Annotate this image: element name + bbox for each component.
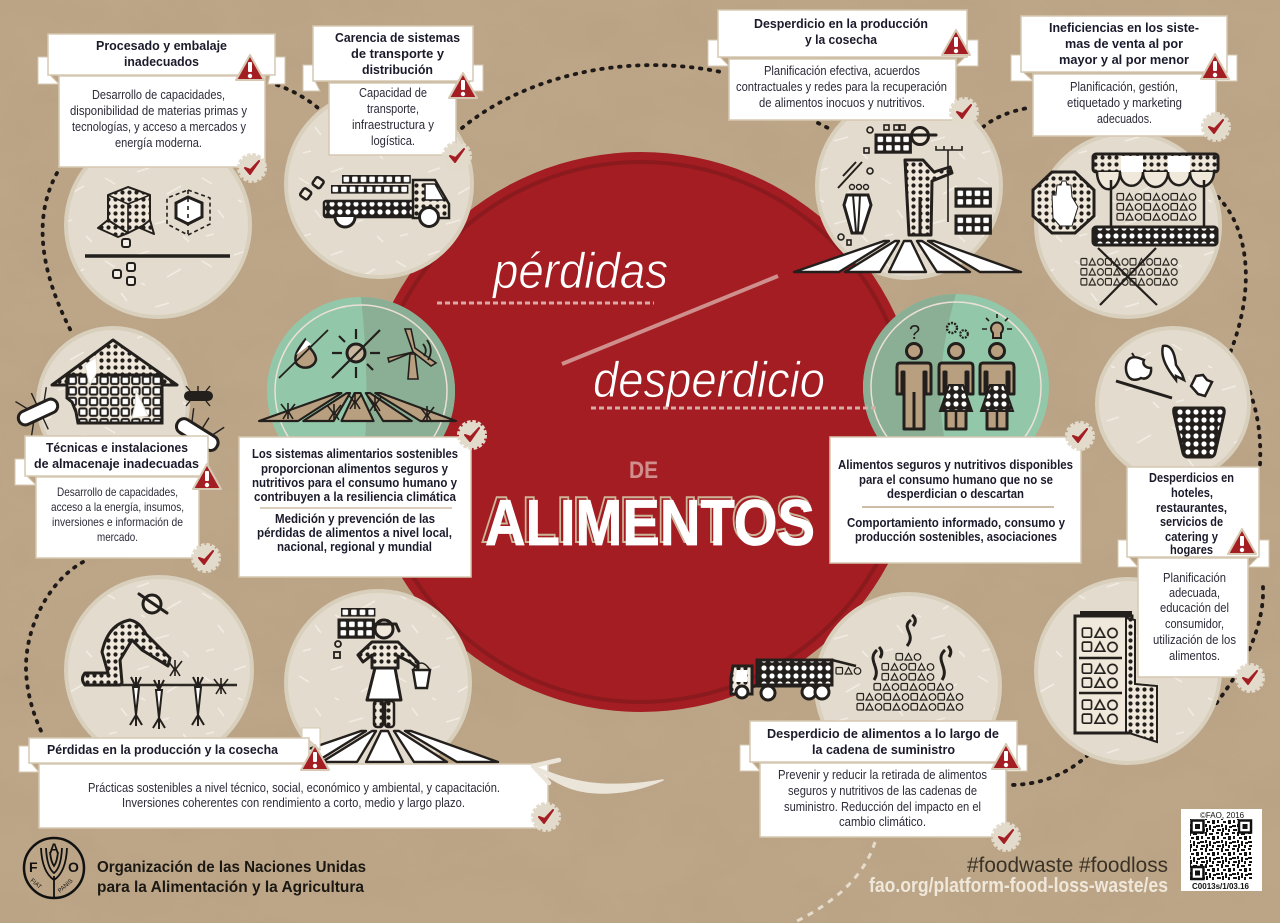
body text <box>352 86 435 148</box>
icon: warning <box>236 55 264 80</box>
body text: mercado. <box>97 530 138 544</box>
body text: acceso a la energía, insumos, <box>51 500 184 514</box>
heading: de almacenaje inadecuadas <box>34 456 199 471</box>
body text: etiquetado y marketing <box>1067 96 1182 110</box>
body text: Prevenir y reducir la retirada de alimentos <box>778 768 987 782</box>
heading <box>34 440 199 471</box>
body text: adecuada, <box>1169 586 1220 600</box>
text block: nutritivos para el consumo humano y <box>252 476 457 490</box>
circle: hoteles y hogares <box>1097 328 1249 480</box>
body text: inversiones e información de <box>52 515 183 529</box>
heading: Desperdicio de alimentos a lo largo de <box>767 726 999 741</box>
url: fao.org/platform-food-loss-waste/es <box>869 875 1168 897</box>
icon: warning <box>942 30 970 55</box>
big curved arrow <box>533 760 663 793</box>
body text: Planificación, gestión, <box>1070 80 1178 94</box>
text block: contribuyen a la resiliencia climática <box>254 490 457 504</box>
body text: educación del <box>1160 601 1229 615</box>
icon: check <box>239 155 265 181</box>
icon: check <box>459 422 485 448</box>
QR code <box>1181 809 1262 891</box>
organization name <box>97 859 366 896</box>
icon: check <box>1203 114 1229 140</box>
logo: FAO: F <box>29 859 38 875</box>
icon: market stall <box>1033 154 1218 305</box>
icon: open fridge <box>1075 613 1157 742</box>
icon: damaged warehouse with termites <box>11 340 228 463</box>
body text: logística. <box>371 134 415 148</box>
heading <box>754 16 928 47</box>
icon: warning <box>1228 529 1256 554</box>
icon: water, sun, wind <box>259 329 456 422</box>
hashtags: #foodwaste #foodloss <box>967 854 1168 877</box>
central red circle <box>361 152 921 712</box>
icon: check <box>533 804 559 830</box>
body text: de alimentos inocuos y nutritivos. <box>759 96 925 110</box>
icon: warning <box>193 464 221 489</box>
body text: Prácticas sostenibles a nivel técnico, social, económico y ambiental, y capacitación. <box>88 781 500 795</box>
text block <box>252 447 458 554</box>
body text <box>1067 80 1182 126</box>
panel: sistemas alimentarios sostenibles <box>239 422 485 577</box>
heading: Procesado y embalaje <box>96 38 227 53</box>
body text: energía moderna. <box>115 136 202 150</box>
body text <box>736 64 947 110</box>
circle: consumidores (green) <box>863 294 1049 480</box>
circle: agricultor <box>66 577 252 763</box>
body text: transporte, <box>367 102 419 116</box>
body text: Planificación efectiva, acuerdos <box>764 64 920 78</box>
title: alimentos: ALIMENTOS <box>485 486 815 559</box>
body text <box>70 88 248 150</box>
body text <box>1153 571 1236 663</box>
heading: hogares <box>1170 542 1213 557</box>
heading: la cadena de suministro <box>812 742 955 757</box>
body text: contractuales y redes para la recuperación <box>736 80 947 94</box>
panel: procesado y embalaje <box>38 34 285 181</box>
heading: Pérdidas en la producción y la cosecha <box>47 742 279 757</box>
heading: servicios de <box>1160 514 1223 529</box>
logo: FAO: PANIS <box>57 878 74 894</box>
circle: procesado y embalaje <box>66 133 250 317</box>
panel: almacenaje <box>15 436 221 571</box>
heading: Técnicas e instalaciones <box>46 440 188 455</box>
body text: utilización de los <box>1153 633 1236 647</box>
body text: Inversiones coherentes con rendimiento a corto, medio y largo plazo. <box>122 796 465 810</box>
logo: FAO: O <box>68 859 79 875</box>
icon: check <box>1067 423 1093 449</box>
text block: Alimentos seguros y nutritivos disponibles <box>838 458 1073 472</box>
heading: y la cosecha <box>805 32 878 47</box>
panel: desperdicio en la producción <box>708 10 978 125</box>
body text: suministro. Reducción del impacto en el <box>784 800 981 814</box>
logo: FAO: FIAT <box>29 878 42 891</box>
heading: distribución <box>362 62 433 77</box>
icon: farmer with crate <box>794 125 1021 272</box>
icon: check <box>1237 665 1263 691</box>
heading: Desperdicio en la producción <box>754 16 928 31</box>
text block: Medición y prevención de las <box>275 512 435 526</box>
heading <box>335 30 460 77</box>
heading: inadecuados <box>124 54 199 69</box>
body text <box>51 485 184 544</box>
text block <box>838 458 1073 544</box>
panel: hoteles y hogares <box>1118 467 1269 691</box>
icon: warning <box>992 744 1020 769</box>
heading: Carencia de sistemas <box>335 30 460 45</box>
body text: Desarrollo de capacidades, <box>92 88 225 102</box>
body text: consumidor, <box>1165 617 1224 631</box>
heading <box>767 726 999 757</box>
heading <box>1049 20 1199 67</box>
heading: catering y <box>1165 529 1219 544</box>
icon: three people: ? <box>909 322 920 344</box>
text block: Los sistemas alimentarios sostenibles <box>252 447 458 461</box>
title: pérdidas: pérdidas <box>491 243 668 299</box>
heading: de transporte y <box>351 46 445 61</box>
circle: almacenaje <box>11 328 228 478</box>
panel: alimentos seguros <box>830 423 1093 563</box>
body text: seguros y nutritivos de las cadenas de <box>788 784 977 798</box>
panel: pérdidas en la producción <box>19 728 559 830</box>
title: desperdicio: desperdicio <box>593 352 825 408</box>
icon: warning <box>449 73 477 98</box>
text block: producción sostenibles, asociaciones <box>855 530 1057 544</box>
white dashed path at bottom <box>795 842 875 922</box>
title: de: DE <box>629 457 658 484</box>
panel: cadena de suministro <box>740 721 1027 850</box>
icon: check <box>993 824 1019 850</box>
icon: truck <box>299 175 449 227</box>
body text <box>778 768 987 829</box>
heading: mas de venta al por <box>1065 36 1183 51</box>
logo: FAO: A <box>49 840 59 856</box>
dotted connector paths <box>26 65 1263 785</box>
body text: disponibilidad de materias primas y <box>70 104 248 118</box>
heading: Ineficiencias en los siste- <box>1049 20 1199 35</box>
panel: ineficiencias <box>1011 16 1237 140</box>
title: alimentos: ALIMENTOS <box>481 483 813 556</box>
icon: check <box>193 545 219 571</box>
body text: infraestructura y <box>352 118 435 132</box>
circle: desperdicio en la producción <box>794 94 1021 278</box>
organization name: Organización de las Naciones Unidas <box>97 859 366 876</box>
body text: Capacidad de <box>359 86 427 100</box>
circle: sistemas sostenibles (green) <box>259 297 456 485</box>
heading: Desperdicios en <box>1149 470 1234 485</box>
icon: boxes <box>85 187 230 285</box>
heading <box>96 38 227 69</box>
circle: ineficiencias <box>1033 133 1220 317</box>
heading: mayor y al por menor <box>1059 52 1189 67</box>
icon: food and basket <box>1116 346 1224 457</box>
circle: cadena de suministro <box>731 594 1000 778</box>
body text: tecnologías, y acceso a mercados y <box>72 120 247 134</box>
diagonal slash <box>562 276 778 364</box>
text block: proporcionan alimentos seguros y <box>261 462 448 476</box>
body text: Planificación <box>1163 571 1226 585</box>
text block: Comportamiento informado, consumo y <box>847 516 1065 530</box>
text block: desperdician o descartan <box>887 487 1024 501</box>
body text: cambio climático. <box>839 815 926 829</box>
text block: para el consumo humano que no se <box>859 473 1053 487</box>
icon: three people <box>897 314 1014 429</box>
QR code: ©FAO, 2016 <box>1200 811 1245 820</box>
icon: check <box>444 143 470 169</box>
body text: alimentos. <box>1169 649 1220 663</box>
icon: bending farmer and carrots <box>82 594 237 729</box>
body text: Desarrollo de capacidades, <box>57 485 178 499</box>
panel: transporte <box>303 26 483 169</box>
text block: pérdidas de alimentos a nivel local, <box>257 526 452 540</box>
organization name: para la Alimentación y la Agricultura <box>97 879 364 896</box>
circle: cosecha <box>271 591 498 775</box>
body text: adecuados. <box>1097 112 1152 126</box>
heading: hoteles, <box>1171 485 1213 500</box>
text block: nacional, regional y mundial <box>277 540 432 554</box>
icon: warning <box>301 745 329 770</box>
icon: woman with crate and bucket <box>271 608 498 762</box>
body text <box>88 781 500 810</box>
circle: frigorífico <box>1036 579 1220 763</box>
circle: transporte <box>286 91 472 277</box>
heading: restaurantes, <box>1156 500 1227 515</box>
icon: dumping truck and rotting pile <box>731 615 964 712</box>
heading <box>1149 470 1234 557</box>
QR code: C0013s/1/03.16 <box>1192 882 1250 891</box>
icon: warning <box>1201 54 1229 79</box>
icon: check <box>951 99 977 125</box>
logo: FAO <box>24 838 84 898</box>
